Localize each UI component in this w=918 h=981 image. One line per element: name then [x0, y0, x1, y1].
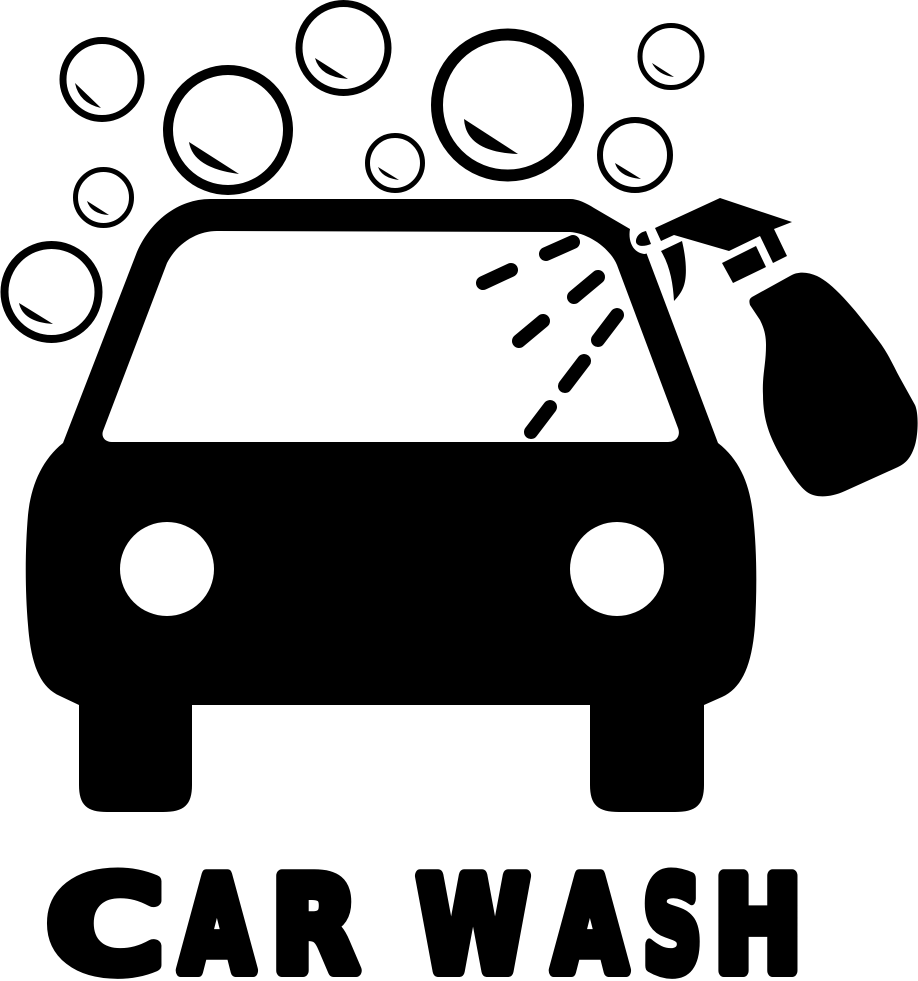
hook inner: [636, 231, 651, 246]
spray head: [655, 198, 792, 263]
bubble 2: [168, 70, 288, 190]
bubble 3: [76, 170, 132, 226]
bubble 5: [299, 4, 388, 92]
bubble 1: [63, 40, 141, 118]
bottle collar: [722, 246, 766, 283]
bubble 8: [640, 26, 702, 88]
car: [26, 199, 756, 812]
bubble 6: [437, 34, 578, 176]
bubble 4: [4, 245, 98, 339]
headlight left: [120, 522, 214, 616]
car body: [26, 199, 756, 812]
bubble 9: [600, 120, 670, 190]
title: CAR WASH: [47, 849, 802, 981]
bubble 7: [368, 136, 422, 190]
water spray dashes: [483, 242, 617, 432]
trigger: [661, 241, 686, 301]
windshield: [102, 231, 679, 442]
soap bubbles: [4, 4, 702, 339]
spray bottle: [630, 198, 918, 496]
bottle body: [749, 273, 918, 496]
hook ring on nozzle: [630, 226, 656, 254]
headlight right: [570, 522, 664, 616]
